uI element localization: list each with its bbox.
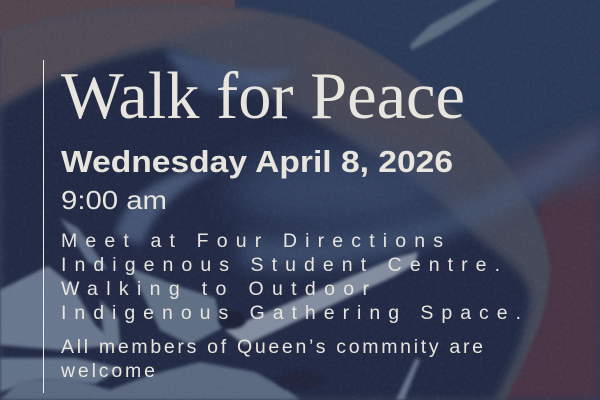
sage debris xyxy=(0,362,300,400)
sage bundle xyxy=(410,0,505,50)
table band above bowl xyxy=(480,120,600,200)
white stick xyxy=(225,252,418,345)
location details: Indigenous Student Centre. xyxy=(61,254,500,276)
table surface xyxy=(495,165,600,400)
welcome note: welcome xyxy=(60,360,155,382)
date: Wednesday April 8, 2026 xyxy=(61,144,453,179)
ember patch xyxy=(218,311,246,329)
smoke plume lower right xyxy=(240,125,600,269)
location details: Indigenous Gathering Space. xyxy=(61,302,521,324)
location details xyxy=(61,230,521,324)
burnt sage leaves bottom left xyxy=(0,266,118,350)
bowl interior xyxy=(0,48,530,400)
bowl rim warm tone xyxy=(0,7,270,108)
location details: Meet at Four Directions xyxy=(61,230,443,252)
smoke wisp top xyxy=(165,50,295,94)
vertical rule xyxy=(43,60,44,393)
location details: Walking to Outdoor xyxy=(61,278,370,300)
smoke ring xyxy=(115,171,215,245)
bowl rim right warm tone xyxy=(300,30,460,150)
upper left table xyxy=(0,0,235,35)
welcome note xyxy=(60,336,483,382)
title: Walk for Peace xyxy=(61,59,465,133)
welcome note: All members of Queen’s commnity are xyxy=(61,336,483,358)
time: 9:00 am xyxy=(61,185,167,215)
twig xyxy=(396,358,420,400)
soft smoke: interior haze xyxy=(230,150,450,230)
